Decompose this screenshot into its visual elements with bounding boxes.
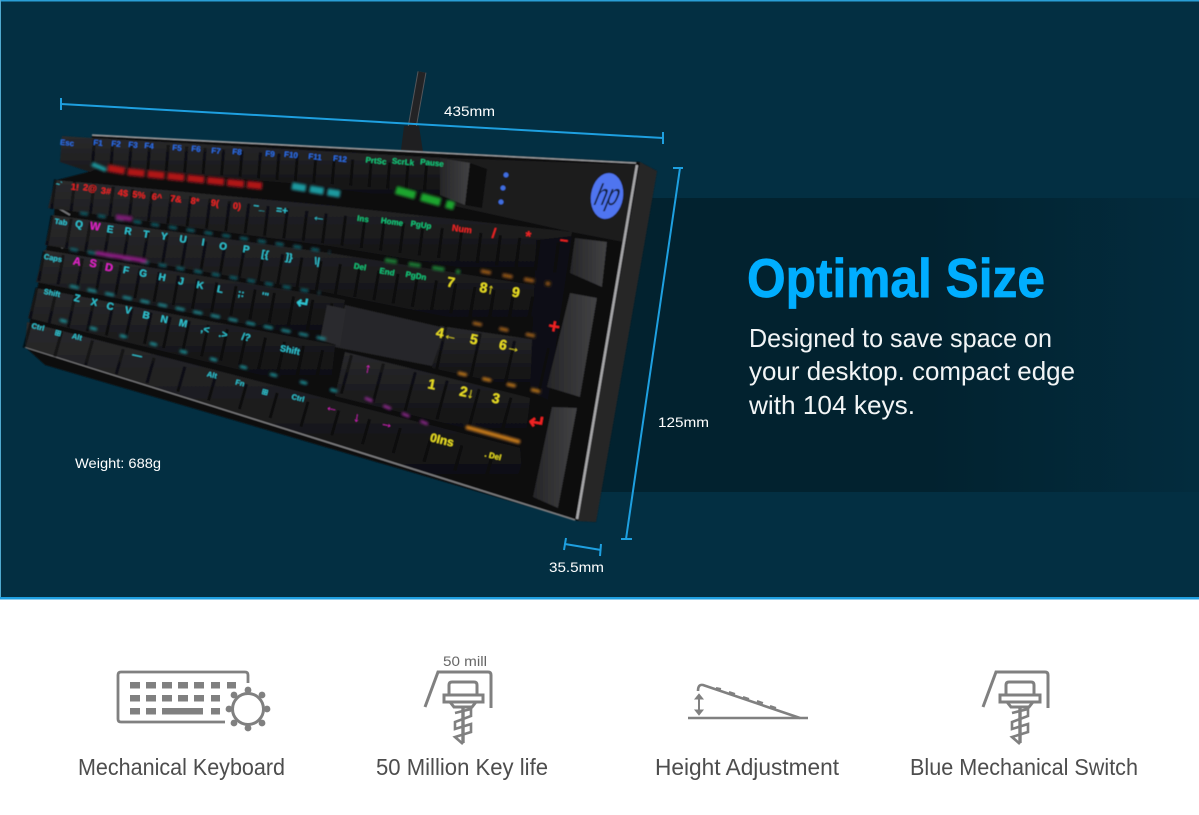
function row labels: F5 (172, 143, 183, 153)
panel: dark product panel (0, 0, 1199, 600)
letter key labels: Z (73, 293, 81, 305)
magenta key labels: ← (324, 398, 340, 416)
function row labels: F4 (144, 141, 155, 151)
height label: 35.5mm (549, 559, 604, 575)
HP logo (588, 171, 627, 221)
number row labels: 5% (132, 189, 146, 201)
letter key labels: T (142, 229, 150, 241)
letter key labels: R (124, 226, 133, 238)
number row labels: 2@ (83, 182, 98, 194)
letter key labels: Y (160, 231, 168, 243)
magenta key labels: ↑ (363, 360, 373, 376)
icon: key switch 50 million (425, 672, 491, 744)
letter key labels: F (122, 265, 130, 277)
number row labels: * (524, 228, 532, 246)
letter key labels: ]} (285, 252, 294, 264)
width dimension line (61, 98, 663, 144)
number row labels: 0) (232, 201, 242, 211)
description text: with 104 keys. (748, 390, 915, 420)
height dimension line (564, 538, 601, 556)
letter key labels: B (141, 310, 151, 322)
modifier key labels: Fn (234, 378, 246, 389)
function row labels: F7 (211, 146, 222, 156)
modifier key labels: ⊞ (54, 328, 63, 338)
number row labels: 3# (100, 185, 112, 197)
function row labels: F9 (265, 149, 276, 159)
caption: blue switch: Blue Mechanical Switch (910, 754, 1138, 780)
modifier key labels: Caps (43, 252, 63, 264)
numpad labels: 1 (427, 375, 438, 393)
numpad labels: 0Ins (429, 430, 456, 450)
description text: your desktop. compact edge (749, 356, 1075, 386)
function row labels: Esc (59, 138, 75, 148)
icon: mechanical keyboard (118, 672, 270, 731)
number row labels: + (546, 315, 562, 339)
letter key labels: J (177, 276, 185, 288)
numpad labels: . Del (484, 450, 502, 462)
letter key labels: ;: (237, 288, 245, 300)
label: 50 mill: 50 mill (443, 653, 487, 669)
letter key labels: '" (260, 291, 270, 303)
numpad labels (427, 273, 522, 462)
letter key labels: K (195, 280, 205, 292)
navigation key labels (353, 155, 445, 282)
letter key labels: L (216, 284, 224, 296)
magenta key labels: W (89, 220, 102, 234)
letter key labels: — (131, 350, 143, 362)
number row labels (70, 182, 570, 435)
keyboard cable (401, 72, 423, 152)
modifier key labels: ⊞ (261, 387, 270, 397)
navigation key labels: PrtSc (365, 155, 387, 167)
number row labels: / (491, 225, 497, 241)
function row labels: F12 (333, 154, 348, 164)
modifier key labels: Shift (279, 343, 301, 357)
depth label: 125mm (658, 414, 709, 430)
letter key labels: H (157, 272, 167, 284)
navigation key labels: Home (380, 216, 404, 228)
navigation key labels: Ins (357, 214, 370, 224)
navigation key labels: PgDn (405, 270, 427, 282)
letter key labels: O (218, 241, 228, 253)
letter key labels: M (178, 318, 188, 330)
letter key labels: ~` (55, 181, 63, 189)
navigation key labels: End (379, 266, 395, 278)
numpad labels: 8↑ (478, 279, 496, 297)
icon: height adjustment (688, 685, 808, 718)
width label: 435mm (444, 103, 495, 119)
weight label: Weight: 688g (75, 455, 161, 471)
letter key labels: ↵ (295, 294, 311, 314)
magenta key labels: A (72, 255, 82, 269)
key rows (25, 136, 572, 503)
key separators (26, 152, 560, 476)
number row labels: 9( (210, 198, 220, 208)
letter key labels: =+ (276, 205, 289, 217)
letter key labels: −_ (253, 201, 266, 213)
magenta key labels (72, 220, 395, 432)
letter key labels: V (124, 305, 133, 317)
letter key labels: X (90, 297, 99, 309)
number row labels: 4$ (117, 187, 129, 199)
caption: height adjustment: Height Adjustment (655, 754, 840, 780)
letter key labels: .> (218, 329, 229, 341)
numpad labels: 2↓ (458, 383, 476, 401)
modifier key labels: Ctrl (291, 392, 305, 404)
modifier key labels: Tab (54, 217, 68, 228)
numpad labels: 7 (446, 273, 456, 291)
panel: feature strip (0, 600, 1199, 815)
function row labels: F1 (93, 138, 104, 148)
caption: mechanical keyboard: Mechanical Keyboard (78, 754, 285, 780)
letter key labels: ← (311, 207, 327, 225)
depth dimension line (621, 168, 683, 539)
keyboard illustration (25, 135, 657, 522)
number row labels: 1! (70, 182, 80, 192)
modifier key labels: Shift (43, 287, 62, 299)
letter key labels: G (138, 268, 148, 280)
number row labels: Num (451, 223, 473, 235)
magenta key labels: → (379, 414, 395, 432)
modifier key labels: Alt (206, 369, 218, 381)
function row labels: F2 (111, 139, 122, 149)
function row labels (59, 138, 348, 164)
function row labels: F11 (308, 152, 323, 162)
number row labels: − (558, 232, 570, 250)
number row labels: 7& (170, 193, 183, 205)
backlight strips between rows (60, 164, 550, 442)
description text: Designed to save space on (749, 323, 1052, 353)
number row labels: 6^ (151, 191, 163, 203)
letter key labels: P (242, 244, 250, 256)
caption: key life: 50 Million Key life (376, 754, 548, 780)
function row labels: F6 (191, 144, 202, 154)
navigation key labels: Del (353, 261, 367, 273)
navigation key labels: ScrLk (391, 156, 415, 168)
magenta key labels: ↓ (352, 409, 362, 425)
letter key labels: N (159, 314, 169, 326)
numpad labels: 3 (491, 389, 502, 407)
description text (748, 323, 1075, 420)
magenta key labels: D (104, 261, 114, 275)
letter key labels (55, 181, 327, 362)
letter key labels: U (179, 234, 187, 246)
letter key labels: /? (241, 332, 251, 344)
navigation key labels: PgUp (410, 219, 432, 231)
letter key labels: C (105, 301, 115, 313)
grey key side faces (320, 158, 618, 510)
status LEDs (498, 172, 508, 204)
keyboard chassis (25, 135, 657, 522)
title: Optimal Size (747, 247, 1045, 309)
letter key labels: [{ (261, 249, 270, 261)
modifier key labels: Alt (71, 331, 83, 343)
number row labels: ↵ (527, 411, 547, 435)
letter key labels: I (201, 237, 205, 249)
icon: blue mechanical switch (983, 672, 1048, 744)
letter key labels: Q (74, 219, 84, 231)
numpad labels: 9 (511, 283, 521, 301)
letter key labels: ,< (200, 324, 211, 336)
navigation key labels: Pause (420, 157, 445, 169)
modifier key labels: Ctrl (31, 321, 45, 333)
function row labels: F10 (284, 150, 299, 160)
function row labels: F8 (232, 147, 243, 157)
modifier key labels (31, 217, 305, 404)
number row labels: 8* (190, 196, 200, 207)
letter key labels: E (106, 224, 114, 236)
letter key labels: \| (313, 256, 321, 268)
HP logo: hp (589, 178, 627, 212)
numpad labels: 5 (469, 330, 480, 348)
magenta key labels: S (88, 257, 98, 271)
function row labels: F3 (128, 140, 139, 150)
numpad labels: 6→ (498, 336, 522, 356)
numpad labels: 4← (435, 324, 459, 344)
